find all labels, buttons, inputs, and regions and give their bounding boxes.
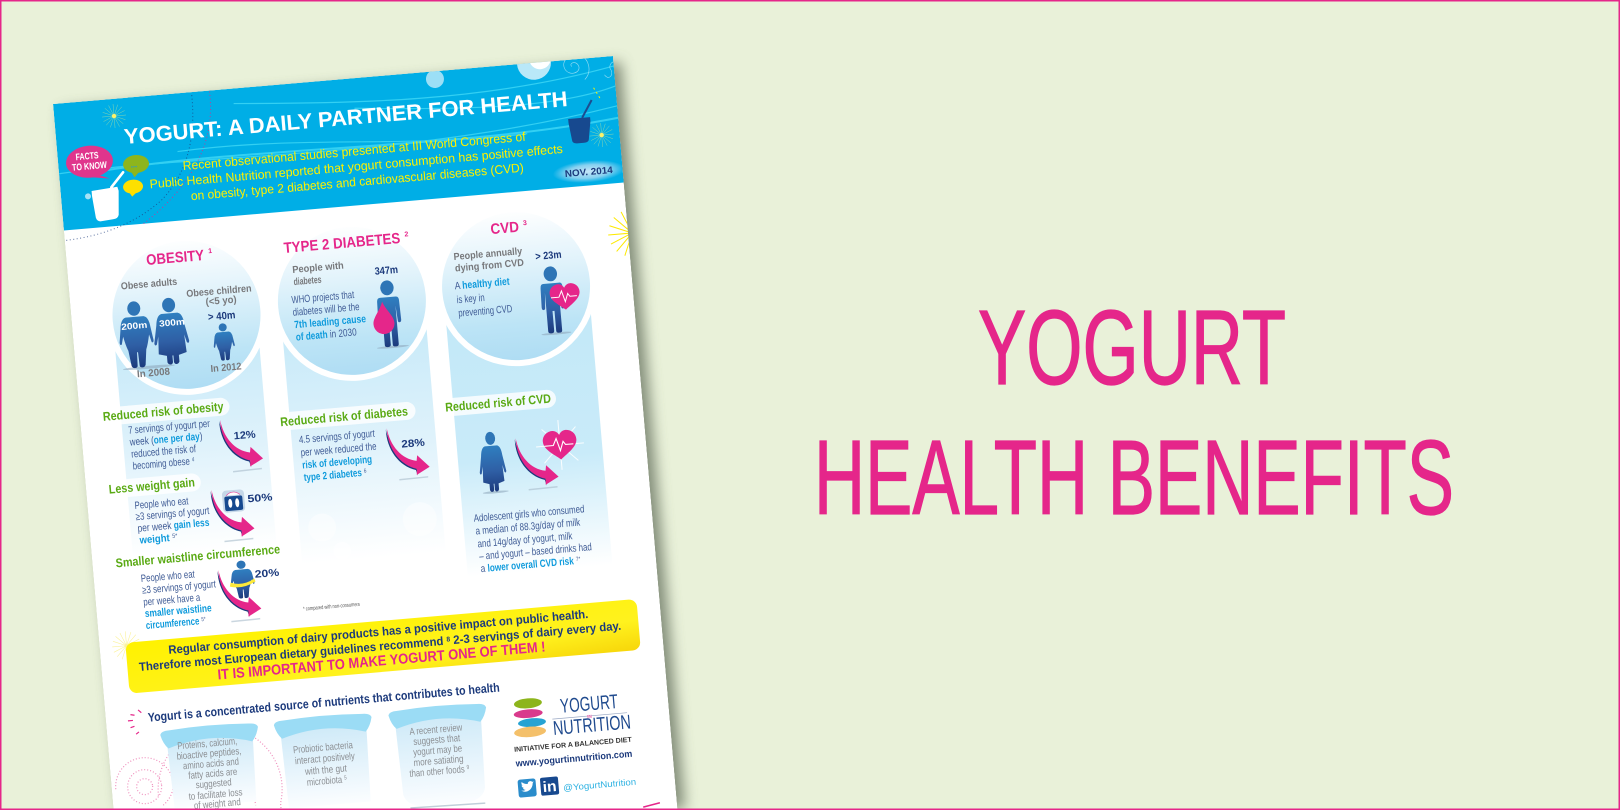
text block: healthy diet	[454, 276, 513, 320]
callout: yellow banner: Therefore most European dietary guidelines recommend	[138, 632, 461, 674]
infographic poster	[52, 37, 706, 810]
text block: WHO projection: WHO projects that	[291, 289, 355, 306]
label: people with diabetes: diabetes	[293, 275, 322, 288]
subtitle: Public Health Nutrition reported that yogurt consumption has positive effects	[149, 142, 563, 191]
label: greater than 23m: > 23m	[535, 249, 562, 263]
panel: probiotic cup	[273, 712, 379, 809]
label: greater than 40m: > 40m	[207, 309, 236, 324]
heading: less weight gain: Less weight gain	[108, 475, 195, 497]
footnote: * compared with non-consumers	[303, 602, 360, 613]
text block: healthy diet: A healthy diet	[454, 276, 510, 292]
star	[102, 104, 126, 128]
heading: reduced risk of cvd: Reduced risk of CVD	[445, 392, 551, 415]
panel: satiating cup: more satiating	[413, 754, 464, 769]
text block: less weight: ≥3 servings of yogurt	[135, 505, 210, 523]
label: in 2012: In 2012	[210, 361, 242, 375]
logo: yogurt in nutrition: YOGURT	[559, 691, 619, 718]
logo: yogurt in nutrition: IN	[587, 714, 592, 719]
text block: 7 servings: 4	[192, 457, 195, 463]
panel: cvd	[424, 203, 617, 578]
title: YOGURT: A DAILY PARTNER FOR HEALTH	[123, 87, 568, 149]
icon: twitter	[517, 778, 537, 798]
icon: heart with rays	[534, 418, 586, 472]
label: 347m: 347m	[374, 264, 399, 278]
heading: cvd: CVD	[490, 219, 520, 238]
heading: concentrated source of nutrients: Yogurt is a concentrated source of nutrients that contributes to health	[147, 681, 500, 725]
text block: adolescent girls: 7*	[576, 557, 581, 563]
text block: 7 servings: becoming obese	[132, 454, 210, 472]
label: obese adults: Obese adults	[120, 277, 178, 293]
text block: healthy diet: preventing CVD	[458, 303, 513, 320]
text block: WHO projection: of death in 2030	[295, 326, 357, 344]
label: people with diabetes	[292, 261, 345, 288]
label: people annually dying: dying from CVD	[455, 258, 524, 275]
icon: weighing scale	[222, 489, 245, 513]
panel: nutrients cup: suggested	[195, 777, 232, 791]
text block: 7 servings: 7 servings of yogurt per	[128, 418, 211, 437]
text block: WHO projection: 7th leading cause	[294, 313, 367, 331]
panel: satiating cup: than other foods	[409, 763, 482, 780]
text block: waistline	[141, 570, 216, 629]
text block: adolescent girls: a lower overall CVD risk	[480, 553, 599, 575]
text block: waistline: smaller waistline	[144, 602, 212, 620]
arrow: 12%	[219, 417, 264, 473]
arrow: 20%	[217, 567, 262, 622]
icon: facts to know bubble: TO KNOW	[72, 160, 107, 174]
text block: less weight: weight	[138, 532, 171, 547]
arrow: 28%	[386, 425, 431, 481]
text block: 4.5 servings: 4.5 servings of yogurt	[299, 428, 375, 446]
arrow: 50%	[210, 486, 255, 542]
label: obese children: Obese children	[186, 283, 252, 300]
text block: less weight: per week gain less	[137, 517, 210, 535]
figure: man with tape measure	[230, 560, 256, 598]
panel: nutrients cup: bioactive peptides,	[176, 746, 242, 763]
label: people annually dying	[453, 246, 524, 275]
heading: type 2 diabetes: TYPE 2 DIABETES	[283, 230, 401, 257]
text block: healthy diet: is key in	[456, 292, 485, 306]
decorative star: right edge	[608, 212, 629, 256]
logo: yogurt in nutrition	[510, 690, 633, 754]
poster shadow	[61, 62, 685, 810]
text block: less weight: 5*	[172, 533, 178, 540]
text block: 4.5 servings: type 2 diabetes	[303, 467, 362, 484]
figure: obese woman 300m: 300m	[159, 317, 185, 329]
panel: obesity	[103, 248, 280, 629]
heading: cvd: 3	[523, 220, 527, 227]
text block: WHO projection: diabetes will be the	[292, 301, 360, 319]
panel: header	[52, 39, 627, 240]
panel: satiating cup	[388, 702, 494, 810]
heading: reduced risk of obesity: Reduced risk of obesity	[102, 400, 224, 424]
decorative pink dotted swirl	[111, 722, 284, 810]
text block: less weight	[134, 498, 210, 544]
text block: waistline: ≥3 servings of yogurt	[142, 578, 216, 597]
text block: waistline: People who eat	[140, 568, 195, 585]
heading: obesity: OBESITY	[146, 247, 205, 269]
stat: 28%: 28%	[401, 437, 426, 451]
link: website: www.yogurtinnutrition.com	[514, 749, 633, 770]
panel: satiating cup: 9	[466, 765, 470, 771]
text block: 7 servings: week (one per day)	[128, 430, 203, 449]
panel: probiotic cup: Probiotic bacteria	[293, 740, 354, 756]
text block: adolescent girls: a median of 88.3g/day of milk	[475, 516, 581, 537]
text block: waistline: circumference	[145, 615, 200, 632]
icon: green bubble	[123, 155, 149, 178]
figure: man with blood drop	[370, 279, 409, 350]
label: people annually dying: People annually	[453, 246, 523, 263]
decorative swirl	[563, 58, 590, 80]
logo: yogurt in nutrition: NUTRITION	[552, 711, 632, 740]
figure: man with heart	[536, 264, 583, 336]
decorative bubble	[517, 62, 551, 80]
icon: logo stones	[511, 697, 547, 738]
heading: smaller waistline circumference: Smaller waistline circumference	[115, 542, 281, 570]
panel: satiating cup: suggests that	[413, 733, 461, 748]
heading: concentrated source of nutrients	[127, 679, 501, 735]
heading: yogurt health benefits	[814, 289, 1454, 537]
callout: yellow banner: 8	[446, 636, 451, 644]
text block: adolescent girls	[473, 503, 594, 575]
callout: yellow banner: Regular consumption of dairy products has a positive impact on public health.	[168, 607, 589, 657]
label: obese children: (<5 yo)	[205, 295, 237, 308]
panel: nutrients cup: to facilitate loss	[188, 787, 243, 803]
stat: 50%: 50%	[247, 491, 274, 505]
text block: adolescent girls: – and yogurt – based drinks had	[479, 541, 592, 563]
icon: green bubble: ...	[130, 160, 138, 170]
callout: yellow banner	[125, 599, 641, 694]
arrow: cvd	[515, 435, 559, 491]
text block: 4.5 servings: risk of developing	[302, 454, 373, 472]
icon: linkedin: in	[542, 778, 557, 796]
icon: facts to know bubble	[66, 146, 113, 178]
text block: WHO projection	[291, 288, 368, 344]
label: in 2008: In 2008	[137, 366, 171, 380]
label: obese children	[186, 286, 252, 307]
panel: nutrients cup: fatty acids are	[188, 767, 238, 782]
figure: obese woman 300m	[154, 298, 190, 364]
icon: navy yogurt cup	[568, 88, 600, 144]
icon: facts to know bubble: FACTS	[75, 150, 99, 163]
text block: adolescent girls: Adolescent girls who consumed	[473, 503, 585, 525]
text block: 7 servings: reduced the risk of	[131, 443, 197, 461]
heading: yogurt health benefits: YOGURT	[978, 289, 1286, 407]
panel: satiating cup: A recent review	[409, 722, 463, 738]
text block: waistline: 5*	[201, 617, 206, 623]
stat: 20%: 20%	[254, 567, 280, 581]
panel: type 2 diabetes	[261, 218, 451, 566]
panel: probiotic cup: with the gut	[304, 763, 348, 778]
figure: obese child	[214, 323, 235, 361]
panel: nutrients cup: Proteins, calcium,	[177, 736, 238, 752]
social handle: @YogurtNutrition	[563, 777, 636, 793]
panel: obesity: 1	[208, 248, 212, 255]
figure: obese man 200m: 200m	[121, 320, 148, 332]
icon: yellow bubble	[122, 179, 144, 197]
text block: adolescent girls: and 14g/day of yogurt, milk	[477, 530, 573, 550]
decorative swirl	[604, 62, 614, 78]
date badge	[554, 160, 622, 182]
callout: yellow banner: 2-3 servings of dairy every day.	[450, 619, 622, 647]
date badge: NOV. 2014	[564, 165, 614, 180]
text block: 4.5 servings: 6	[364, 469, 367, 475]
callout: yellow banner: IT IS IMPORTANT TO MAKE YOGURT ONE OF THEM !	[217, 639, 546, 683]
heading: type 2 diabetes: 2	[404, 231, 409, 238]
panel: nutrients cup: amino acids and	[183, 757, 239, 772]
icon: linkedin	[540, 776, 559, 796]
subtitle: Recent observational studies presented at III World Congress of	[182, 130, 527, 173]
panel: satiating cup: yogurt may be	[413, 743, 463, 759]
star	[590, 123, 614, 147]
stat: 12%: 12%	[233, 428, 257, 442]
text block: less weight: People who eat	[134, 495, 189, 512]
panel: probiotic cup: 5	[344, 775, 347, 782]
label: people with diabetes: People with	[292, 261, 344, 276]
logo: yogurt in nutrition: INITIATIVE FOR A BALANCED DIET	[514, 737, 633, 754]
subtitle: on obesity, type 2 diabetes and cardiovascular diseases (CVD)	[190, 161, 524, 203]
text block: 7 servings	[128, 421, 210, 470]
text block: 4.5 servings: per week reduced the	[300, 441, 377, 459]
heading: reduced risk of diabetes: Reduced risk of diabetes	[280, 404, 408, 429]
figure: obese man 200m	[120, 301, 174, 370]
text block: waistline: per week have a	[143, 592, 201, 609]
icon: white yogurt cup	[83, 172, 127, 223]
panel: probiotic cup: interact positively	[295, 751, 355, 767]
figure: adolescent girl	[476, 431, 509, 495]
decorative star: banner	[111, 630, 142, 661]
text block: 4.5 servings	[299, 428, 379, 484]
decorative pink line	[643, 803, 660, 807]
panel: nutrients cup	[160, 721, 265, 810]
decorative bubble	[426, 71, 444, 88]
panel: probiotic cup: microbiota	[306, 774, 353, 789]
